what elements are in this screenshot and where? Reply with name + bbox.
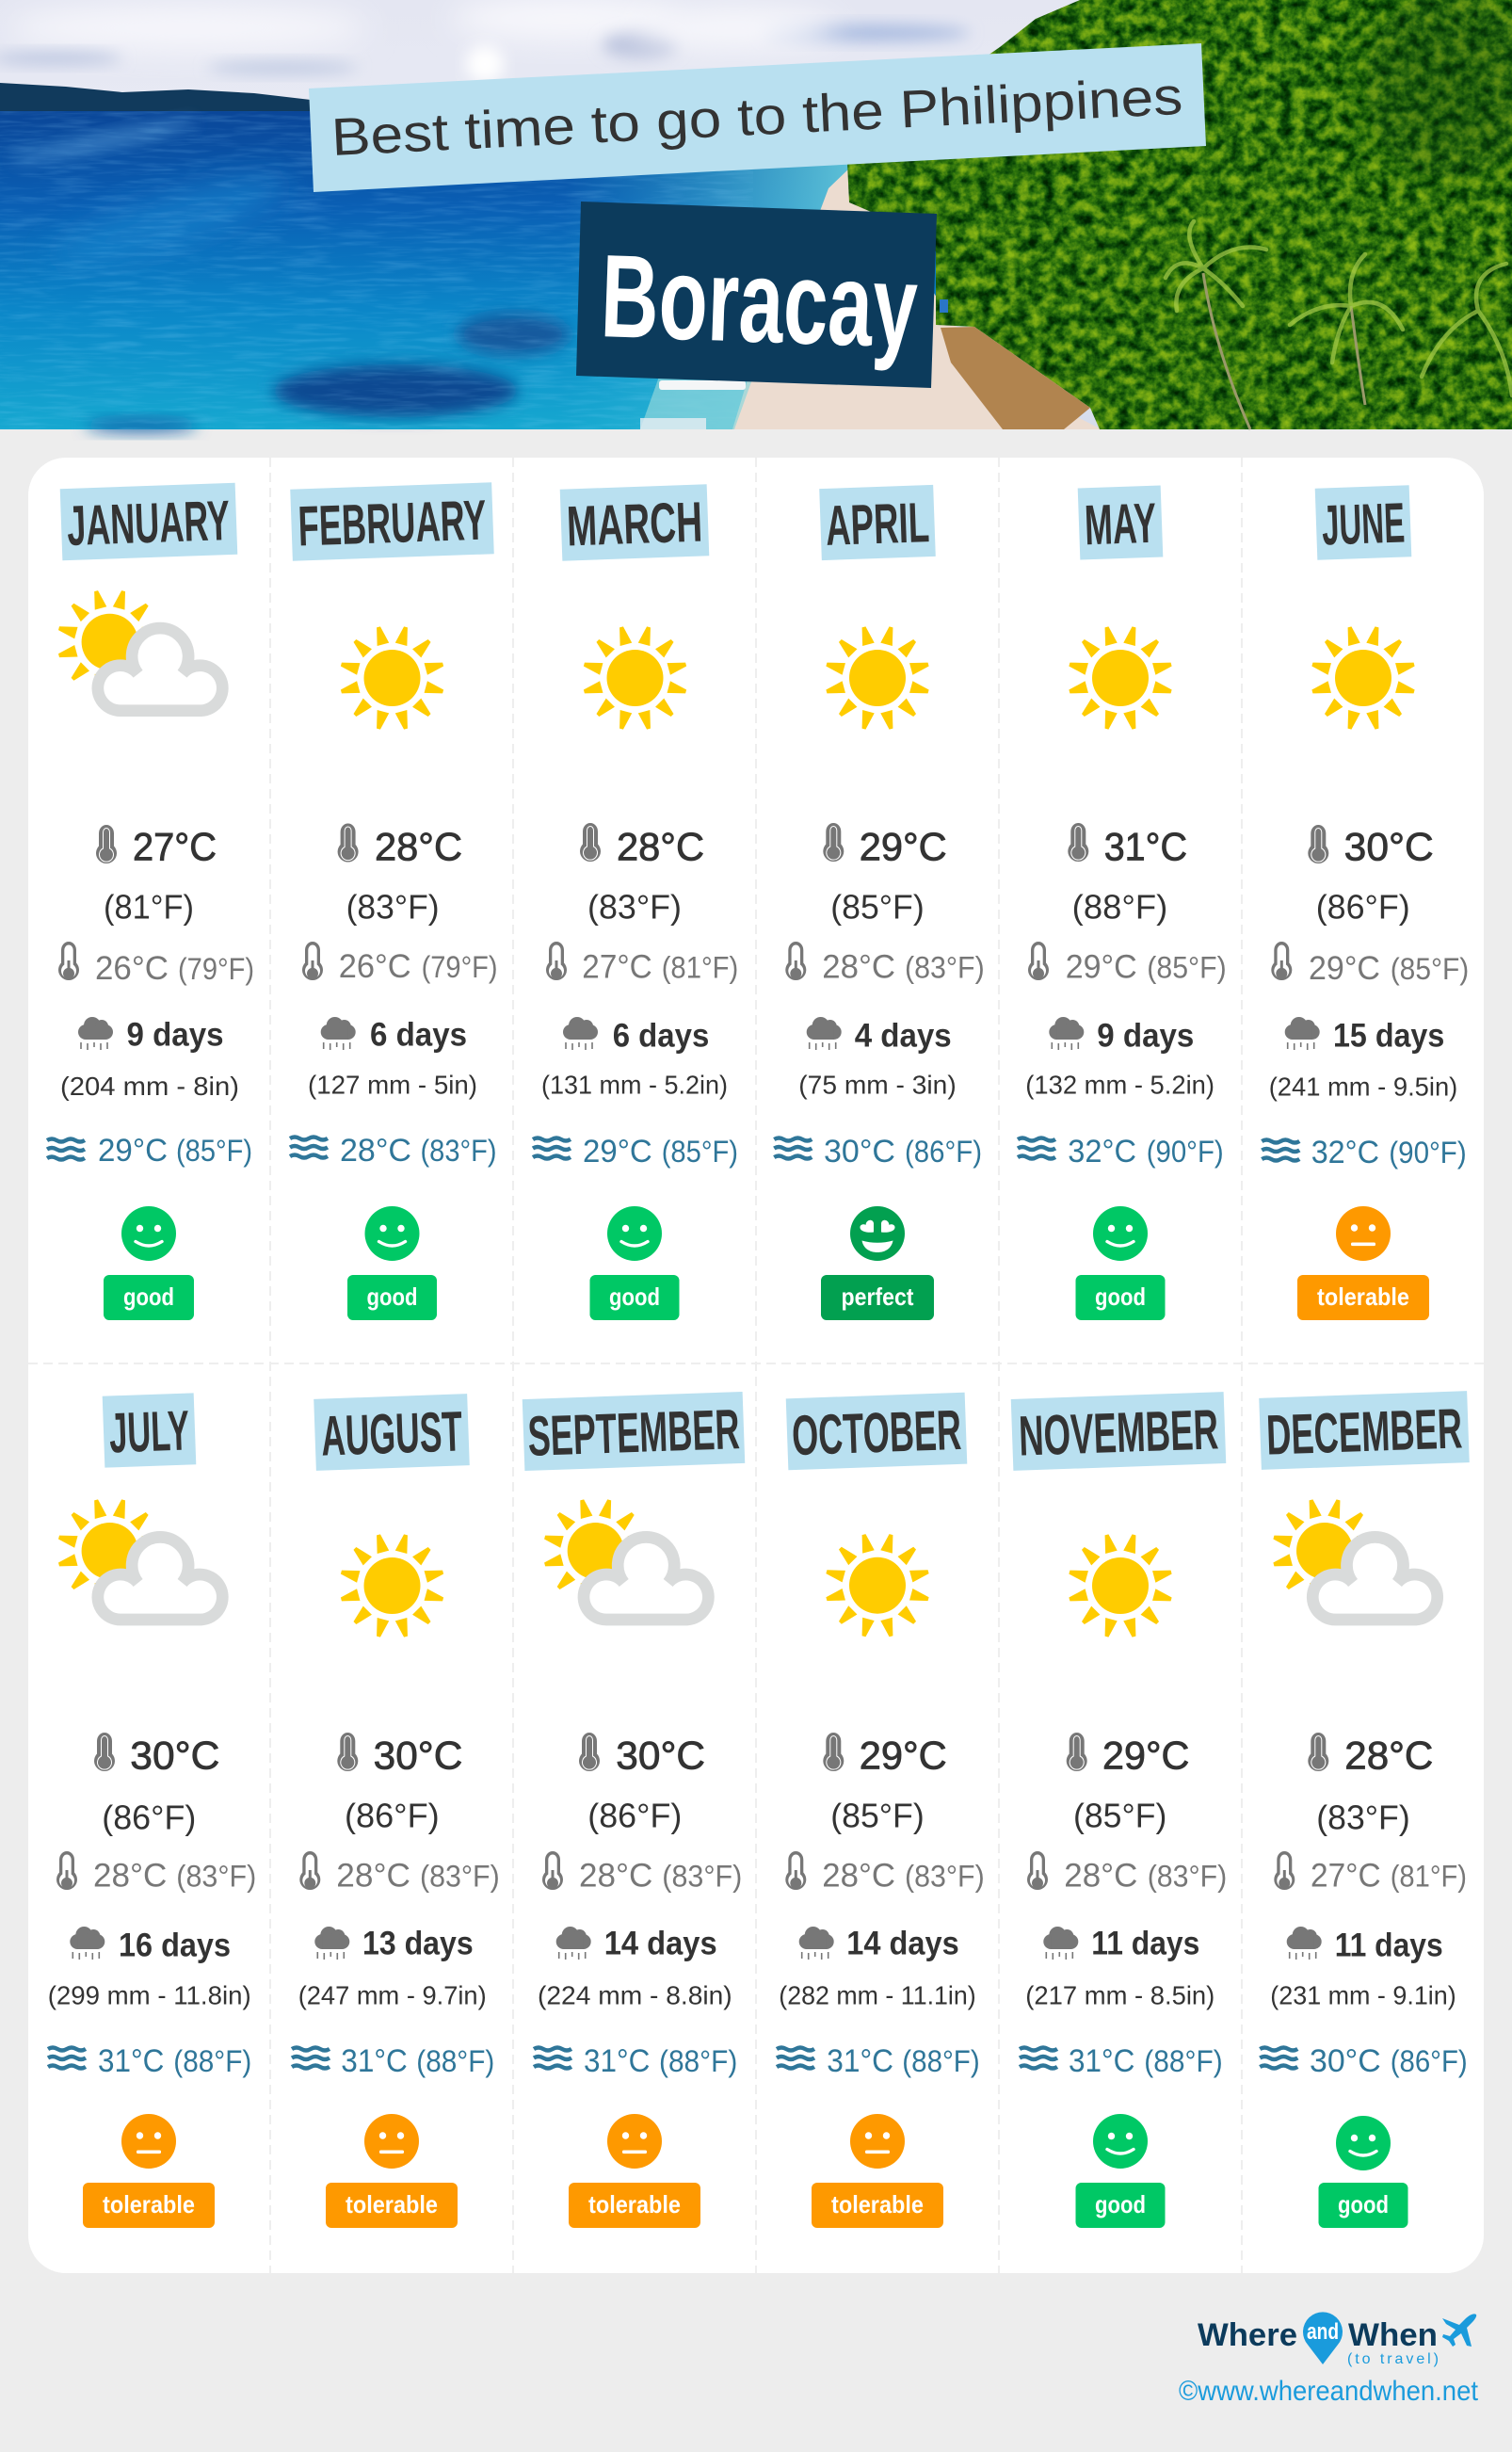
rainfall: (241 mm - 9.5in)	[1269, 1072, 1457, 1101]
month tag	[103, 1393, 196, 1468]
night temperature: 28°C	[579, 1857, 652, 1894]
sea temperature: (88°F)	[659, 2044, 737, 2078]
daytime temperature: 29°C	[1102, 1733, 1189, 1777]
night temperature	[336, 1857, 500, 1894]
icon: waves	[1262, 1139, 1299, 1160]
icon: thermometer	[1308, 1733, 1328, 1771]
rating badge: tolerable	[103, 2190, 195, 2218]
rainy days: 14 days	[604, 1926, 717, 1962]
sea temperature: 28°C	[340, 1133, 411, 1169]
icon: sun	[1311, 625, 1416, 731]
night temperature	[582, 948, 738, 985]
icon: map pin	[1303, 2312, 1343, 2364]
sea temperature: 30°C	[824, 1134, 895, 1170]
icon: night thermometer	[785, 1851, 806, 1890]
daytime temperature fahrenheit: (86°F)	[345, 1797, 440, 1835]
sea temperature: (90°F)	[1147, 1135, 1224, 1169]
icon: rain cloud	[563, 1017, 598, 1050]
icon: sun	[1068, 1533, 1173, 1638]
rainfall: (282 mm - 11.1in)	[779, 1980, 976, 2009]
sea temperature	[1068, 1134, 1224, 1170]
night temperature	[1064, 1857, 1227, 1894]
sea temperature: 29°C	[583, 1134, 652, 1170]
rating badge: tolerable	[831, 2190, 924, 2218]
daytime temperature fahrenheit: (83°F)	[346, 887, 440, 927]
night temperature	[822, 948, 985, 985]
rating badge: good	[123, 1282, 174, 1311]
sea temperature: (88°F)	[173, 2044, 251, 2078]
sea temperature: (88°F)	[416, 2044, 494, 2078]
night temperature	[339, 948, 498, 985]
cell: November	[1011, 1392, 1227, 2228]
daytime temperature: 28°C	[617, 824, 704, 868]
icon: tolerable face	[121, 2114, 176, 2169]
icon: sun	[1068, 625, 1173, 731]
night temperature: 28°C	[93, 1857, 167, 1894]
night temperature: (81°F)	[662, 950, 738, 984]
cell: February	[290, 482, 498, 1320]
icon: waves	[774, 1137, 812, 1158]
month tag: JANUARY	[66, 489, 231, 557]
daytime temperature fahrenheit: (83°F)	[1316, 1798, 1410, 1836]
icon: sun	[340, 625, 444, 731]
cell: July	[48, 1393, 256, 2228]
icon: good face	[1336, 2116, 1391, 2170]
sea temperature	[1069, 2043, 1223, 2079]
night temperature: 28°C	[822, 1857, 895, 1894]
rainfall: (204 mm - 8in)	[60, 1072, 239, 1101]
cell: August	[292, 1394, 500, 2228]
rating badge: good	[1095, 2190, 1146, 2218]
copyright url: ©www.whereandwhen.net	[1179, 2376, 1479, 2407]
sea temperature: 31°C	[827, 2043, 893, 2079]
icon: waves	[47, 1139, 85, 1160]
icon: rain cloud	[799, 1927, 834, 1960]
daytime temperature: 29°C	[860, 824, 947, 868]
icon: thermometer	[1308, 825, 1328, 863]
rating badge: tolerable	[1317, 1282, 1409, 1311]
icon: sun	[583, 625, 687, 731]
icon: waves	[48, 2047, 86, 2068]
night temperature: 28°C	[1064, 1857, 1137, 1894]
month tag	[1315, 485, 1411, 560]
cell: May	[1018, 485, 1227, 1320]
night temperature: 28°C	[822, 948, 895, 985]
daytime temperature: 27°C	[133, 825, 217, 868]
hero photo: Boracay beach and jungle	[0, 0, 1512, 432]
rainfall: (75 mm - 3in)	[798, 1071, 957, 1100]
sea temperature	[824, 1134, 982, 1170]
daytime temperature fahrenheit: (86°F)	[587, 1797, 682, 1835]
icon: waves	[292, 2047, 330, 2068]
rainy days: 13 days	[362, 1926, 474, 1962]
icon: tolerable face	[850, 2114, 905, 2169]
icon: tolerable face	[364, 2114, 419, 2169]
rainy days: 11 days	[1091, 1926, 1199, 1962]
icon: rain cloud	[314, 1927, 349, 1960]
icon: sun	[340, 1533, 444, 1638]
month tag: MAY	[1084, 492, 1157, 557]
icon: rain cloud	[1049, 1017, 1084, 1050]
icon: good face	[607, 1206, 662, 1261]
rainy days: 6 days	[613, 1018, 709, 1055]
sea temperature	[1310, 2043, 1468, 2079]
rating badge: perfect	[842, 1282, 914, 1311]
daytime temperature: 30°C	[1344, 824, 1434, 868]
icon: night thermometer	[1271, 942, 1292, 980]
sea temperature: 31°C	[341, 2043, 408, 2079]
month tag: JUNE	[1321, 491, 1406, 557]
month tag: AUGUST	[320, 1399, 463, 1468]
daytime temperature fahrenheit: (83°F)	[587, 888, 682, 927]
rainfall: (231 mm - 9.1in)	[1270, 1980, 1456, 2009]
rating badge	[83, 2183, 215, 2228]
month tag	[1011, 1392, 1226, 1471]
night temperature: 27°C	[1311, 1857, 1381, 1894]
icon: sun	[825, 625, 930, 731]
cell: March	[533, 484, 738, 1320]
rating badge: good	[1095, 1282, 1146, 1311]
title banner	[309, 43, 1206, 192]
icon: rain cloud	[1287, 1927, 1322, 1960]
night temperature: (81°F)	[1391, 1859, 1467, 1893]
rating badge	[326, 2183, 458, 2228]
icon: good face	[365, 1206, 420, 1261]
icon: sun behind cloud	[543, 1498, 708, 1620]
logo: Where and When to travel: and	[1307, 2319, 1339, 2345]
icon: sun	[825, 1533, 930, 1637]
night temperature: (83°F)	[1148, 1859, 1227, 1893]
sea temperature: (86°F)	[905, 1135, 982, 1169]
icon: waves	[777, 2047, 814, 2068]
rating badge	[347, 1275, 437, 1320]
sea temperature: (88°F)	[1144, 2044, 1223, 2078]
icon: waves	[1018, 1137, 1055, 1158]
rating badge	[1075, 1275, 1166, 1320]
sea temperature	[583, 1134, 738, 1170]
logo: Where and When to travel: Where	[1198, 2317, 1297, 2353]
icon: rain cloud	[556, 1927, 591, 1960]
night temperature	[579, 1857, 742, 1894]
icon: thermometer	[337, 1733, 358, 1771]
cell: October	[777, 1393, 985, 2228]
icon: night thermometer	[1274, 1851, 1295, 1890]
night temperature: (83°F)	[176, 1859, 256, 1893]
title banner: Best time to go to the Philippines	[330, 66, 1184, 167]
logo: Where and When to travel: (to travel)	[1347, 2351, 1439, 2367]
icon: good face	[121, 1206, 176, 1261]
location banner: Boracay: Boracay	[599, 231, 920, 373]
sea temperature	[98, 2043, 251, 2079]
icon: waves	[533, 1137, 571, 1158]
icon: night thermometer	[299, 1851, 320, 1890]
icon: thermometer	[96, 825, 117, 863]
cell: June	[1262, 485, 1469, 1320]
rating badge: good	[609, 1282, 660, 1311]
rating badge	[104, 1275, 194, 1320]
night temperature: 26°C	[339, 948, 411, 985]
rainy days: 6 days	[370, 1017, 467, 1054]
icon: waves	[534, 2047, 571, 2068]
daytime temperature fahrenheit: (86°F)	[1316, 888, 1410, 927]
daytime temperature fahrenheit: (85°F)	[830, 888, 925, 927]
sea temperature: (85°F)	[662, 1135, 738, 1169]
icon: good face	[1093, 1206, 1148, 1261]
icon: thermometer	[1068, 823, 1088, 862]
rating badge	[1297, 1275, 1429, 1320]
rainfall: (131 mm - 5.2in)	[541, 1071, 728, 1100]
rating badge: good	[367, 1282, 418, 1311]
panel: monthly climate table	[28, 458, 1484, 2273]
icon: tolerable face	[607, 2114, 662, 2169]
sea temperature: 32°C	[1311, 1135, 1379, 1170]
rainfall: (299 mm - 11.8in)	[48, 1980, 251, 2009]
rainfall: (247 mm - 9.7in)	[298, 1980, 487, 2009]
daytime temperature: 30°C	[616, 1733, 705, 1777]
rainy days: 4 days	[855, 1018, 952, 1055]
daytime temperature: 28°C	[375, 825, 462, 868]
icon: thermometer	[94, 1733, 115, 1771]
icon: thermometer	[579, 1733, 600, 1771]
rainfall: (224 mm - 8.8in)	[538, 1980, 732, 2009]
night temperature: 27°C	[582, 948, 652, 985]
night temperature	[822, 1857, 985, 1894]
sea temperature	[827, 2043, 980, 2079]
month tag	[314, 1394, 470, 1471]
icon: rain cloud	[321, 1017, 356, 1050]
night temperature: (85°F)	[1391, 952, 1469, 986]
rainfall: (127 mm - 5in)	[308, 1071, 477, 1100]
icon: thermometer	[1067, 1733, 1087, 1771]
icon: night thermometer	[1027, 1851, 1048, 1890]
rating badge: tolerable	[588, 2190, 681, 2218]
icon: thermometer	[823, 1733, 844, 1771]
night temperature	[1311, 1857, 1467, 1894]
month tag	[819, 485, 936, 560]
sea temperature: 31°C	[1069, 2043, 1134, 2079]
sea temperature	[584, 2043, 737, 2079]
icon: night thermometer	[785, 942, 806, 980]
icon: rain cloud	[1043, 1927, 1078, 1960]
icon: waves	[1020, 2047, 1057, 2068]
night temperature: (85°F)	[1147, 950, 1227, 984]
icon: night thermometer	[56, 1851, 77, 1890]
sea temperature	[98, 1133, 252, 1169]
icon: thermometer	[580, 823, 601, 862]
icon: night thermometer	[542, 1851, 563, 1890]
month tag: FEBRUARY	[297, 489, 488, 557]
icon: sun behind cloud	[57, 589, 222, 711]
sea temperature: (86°F)	[1391, 2044, 1468, 2078]
month tag: APRIL	[825, 491, 930, 557]
night temperature: (79°F)	[422, 950, 498, 984]
rating badge	[812, 2183, 943, 2228]
night temperature	[1309, 950, 1469, 987]
sea temperature	[341, 2043, 494, 2079]
rating badge	[569, 2183, 700, 2228]
icon: night thermometer	[302, 942, 323, 980]
icon: rain cloud	[78, 1017, 113, 1050]
night temperature	[95, 950, 254, 987]
month tag: JULY	[108, 1399, 190, 1464]
month tag	[60, 483, 237, 560]
sea temperature	[1311, 1135, 1467, 1170]
night temperature: 26°C	[95, 950, 169, 987]
icon: tolerable face	[1336, 1206, 1391, 1261]
rating badge	[589, 1275, 680, 1320]
icon: sun behind cloud	[57, 1498, 222, 1620]
sea temperature: (90°F)	[1389, 1136, 1467, 1170]
sea temperature: 32°C	[1068, 1134, 1136, 1170]
rainy days: 14 days	[846, 1926, 959, 1962]
sea temperature: 31°C	[98, 2043, 164, 2079]
night temperature: 28°C	[336, 1857, 410, 1894]
rainy days: 16 days	[119, 1928, 231, 1964]
icon: good face	[1093, 2114, 1148, 2169]
rating badge	[1075, 2183, 1166, 2228]
night temperature: (83°F)	[905, 950, 985, 984]
daytime temperature fahrenheit: (81°F)	[104, 887, 194, 927]
location banner: Boracay	[576, 202, 937, 388]
month tag	[560, 484, 709, 561]
rainy days: 15 days	[1333, 1018, 1444, 1055]
icon: waves	[1260, 2047, 1297, 2068]
night temperature: (83°F)	[905, 1859, 985, 1893]
daytime temperature: 30°C	[130, 1733, 219, 1777]
rainy days: 9 days	[126, 1017, 224, 1054]
sea temperature: 30°C	[1310, 2043, 1381, 2079]
daytime temperature fahrenheit: (88°F)	[1072, 888, 1167, 927]
daytime temperature: 31°C	[1104, 824, 1187, 868]
rainfall: (217 mm - 8.5in)	[1025, 1980, 1214, 2009]
daytime temperature: 30°C	[374, 1733, 462, 1777]
night temperature: 29°C	[1066, 948, 1137, 985]
icon: thermometer	[338, 823, 359, 863]
sea temperature: (85°F)	[176, 1134, 252, 1168]
daytime temperature fahrenheit: (85°F)	[1073, 1797, 1166, 1835]
daytime temperature: 28°C	[1344, 1733, 1433, 1777]
cell: January	[47, 483, 254, 1320]
icon: rain cloud	[807, 1017, 842, 1050]
rainy days: 9 days	[1097, 1018, 1194, 1055]
rating badge	[1318, 2183, 1408, 2228]
cell: December	[1259, 1391, 1470, 2228]
icon: rain cloud	[1285, 1017, 1320, 1050]
night temperature	[93, 1857, 256, 1894]
logo: Where and When to travel: When	[1348, 2317, 1438, 2353]
icon: perfect face	[850, 1206, 905, 1261]
logo: Where and When to travel	[1198, 2312, 1476, 2367]
sea temperature: (88°F)	[902, 2044, 980, 2078]
rating badge	[821, 1275, 934, 1320]
rating badge: tolerable	[346, 2190, 438, 2218]
month tag: NOVEMBER	[1018, 1397, 1219, 1468]
icon: plane	[1442, 2314, 1476, 2347]
month tag: MARCH	[566, 491, 703, 557]
icon: thermometer	[823, 823, 844, 862]
month tag	[523, 1392, 745, 1471]
night temperature: (83°F)	[662, 1859, 742, 1893]
cell: April	[774, 485, 985, 1320]
night temperature: (79°F)	[178, 952, 254, 986]
sea temperature	[340, 1133, 497, 1169]
icon: sun behind cloud	[1272, 1498, 1438, 1620]
month tag: OCTOBER	[791, 1398, 962, 1467]
night temperature: 29°C	[1309, 950, 1380, 987]
daytime temperature fahrenheit: (85°F)	[830, 1797, 925, 1835]
icon: rain cloud	[70, 1927, 105, 1960]
sea temperature: 29°C	[98, 1133, 168, 1169]
rainy days: 11 days	[1335, 1928, 1443, 1964]
icon: waves	[290, 1137, 328, 1158]
daytime temperature: 29°C	[860, 1733, 947, 1777]
cell: September	[523, 1392, 745, 2228]
sea temperature: (83°F)	[420, 1134, 497, 1168]
night temperature: (83°F)	[420, 1859, 500, 1893]
rainfall: (132 mm - 5.2in)	[1025, 1071, 1214, 1100]
icon: night thermometer	[1028, 942, 1049, 980]
rating badge: good	[1338, 2190, 1389, 2218]
month tag: SEPTEMBER	[526, 1397, 741, 1468]
icon: night thermometer	[546, 942, 567, 980]
sea temperature: 31°C	[584, 2043, 650, 2079]
month tag	[786, 1393, 967, 1470]
night temperature	[1066, 948, 1227, 985]
month tag	[1078, 485, 1163, 560]
icon: night thermometer	[58, 942, 79, 980]
daytime temperature fahrenheit: (86°F)	[102, 1798, 196, 1836]
month tag	[290, 482, 494, 561]
